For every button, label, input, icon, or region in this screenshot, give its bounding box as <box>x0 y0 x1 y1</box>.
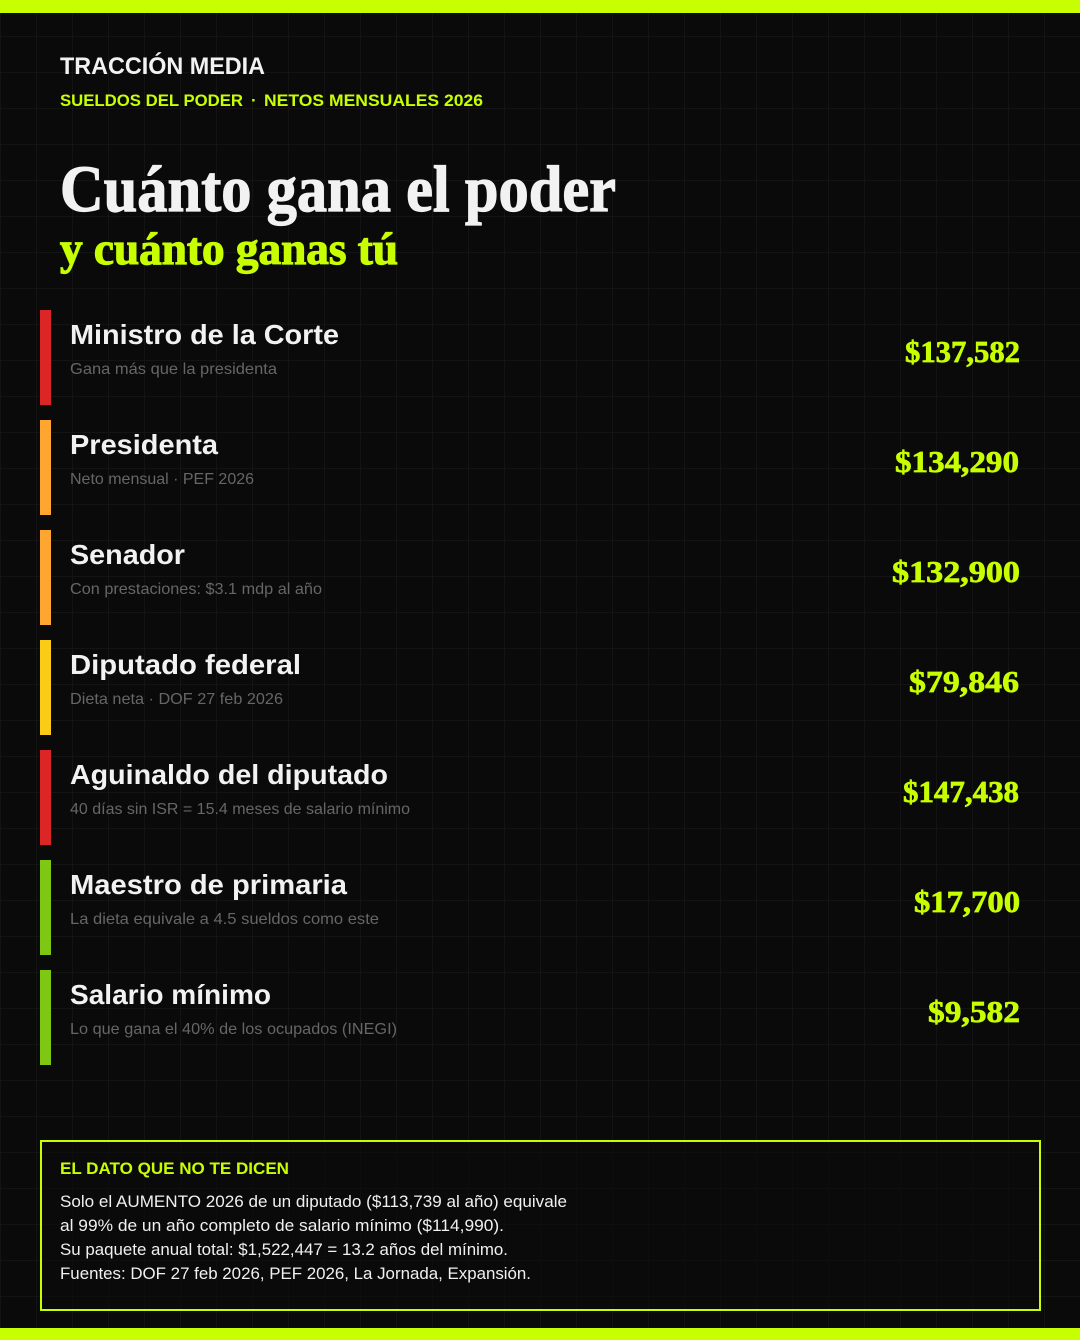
row: Maestro de primaria: La dieta equivale a 4.5 sueldos como este <box>70 911 379 928</box>
row: Maestro de primaria: Maestro de primaria <box>70 869 347 900</box>
brand name: TRACCIÓN MEDIA <box>60 52 265 80</box>
row: Maestro de primaria: $17,700 <box>914 884 1020 919</box>
row: Senador: Con prestaciones: $3.1 mdp al año <box>70 581 322 598</box>
row: Senador <box>40 530 1020 625</box>
callout body: al 99% de un año completo de salario mínimo ($114,990). <box>60 1216 504 1235</box>
row: Senador: $132,900 <box>892 554 1020 589</box>
bottom accent band <box>0 1328 1080 1340</box>
callout body: Fuentes: DOF 27 feb 2026, PEF 2026, La Jornada, Expansión. <box>60 1264 531 1283</box>
row: Diputado federal: $79,846 <box>909 664 1019 699</box>
row: Ministro de la Corte <box>40 310 1020 405</box>
row: Presidenta: $134,290 <box>895 444 1019 479</box>
row: Diputado federal: Diputado federal <box>70 649 301 680</box>
row: Salario mínimo: Salario mínimo <box>70 979 271 1010</box>
row: Ministro de la Corte: $137,582 <box>905 334 1020 369</box>
row: Diputado federal: Dieta neta · DOF 27 feb 2026 <box>70 691 283 708</box>
callout body: Su paquete anual total: $1,522,447 = 13.2 años del mínimo. <box>60 1240 508 1259</box>
top accent band <box>0 0 1080 13</box>
subheading: y cuánto ganas tú <box>60 223 398 274</box>
row: Salario mínimo: $9,582 <box>928 994 1020 1029</box>
row: Salario mínimo <box>40 970 1020 1065</box>
row: Maestro de primaria <box>40 860 1020 955</box>
row: Aguinaldo del diputado: Aguinaldo del diputado <box>70 759 388 790</box>
row: Aguinaldo del diputado: 40 días sin ISR = 15.4 meses de salario mínimo <box>70 801 410 818</box>
series label: SUELDOS DEL PODER <box>60 91 243 110</box>
row: Ministro de la Corte: Gana más que la presidenta <box>70 361 277 378</box>
row: Diputado federal <box>40 640 1019 735</box>
row: Presidenta: Presidenta <box>70 429 218 460</box>
row: Aguinaldo del diputado <box>40 750 1019 845</box>
series label: · <box>251 91 257 110</box>
row: Presidenta: Neto mensual · PEF 2026 <box>70 471 254 488</box>
row: Ministro de la Corte: Ministro de la Corte <box>70 319 339 350</box>
callout heading: EL DATO QUE NO TE DICEN <box>60 1159 289 1178</box>
series label <box>60 91 483 110</box>
main heading: Cuánto gana el poder <box>60 153 616 226</box>
brand header <box>60 52 483 110</box>
salary list <box>40 310 1020 1065</box>
row: Presidenta <box>40 420 1019 515</box>
callout body: Solo el AUMENTO 2026 de un diputado ($113,739 al año) equivale <box>60 1192 567 1211</box>
row: Senador: Senador <box>70 539 185 570</box>
callout body <box>60 1192 567 1283</box>
callout: el dato que no te dicen <box>41 1141 1040 1310</box>
series label: NETOS MENSUALES 2026 <box>264 91 483 110</box>
row: Salario mínimo: Lo que gana el 40% de los ocupados (INEGI) <box>70 1021 397 1038</box>
row: Aguinaldo del diputado: $147,438 <box>903 774 1019 809</box>
title <box>60 153 616 274</box>
